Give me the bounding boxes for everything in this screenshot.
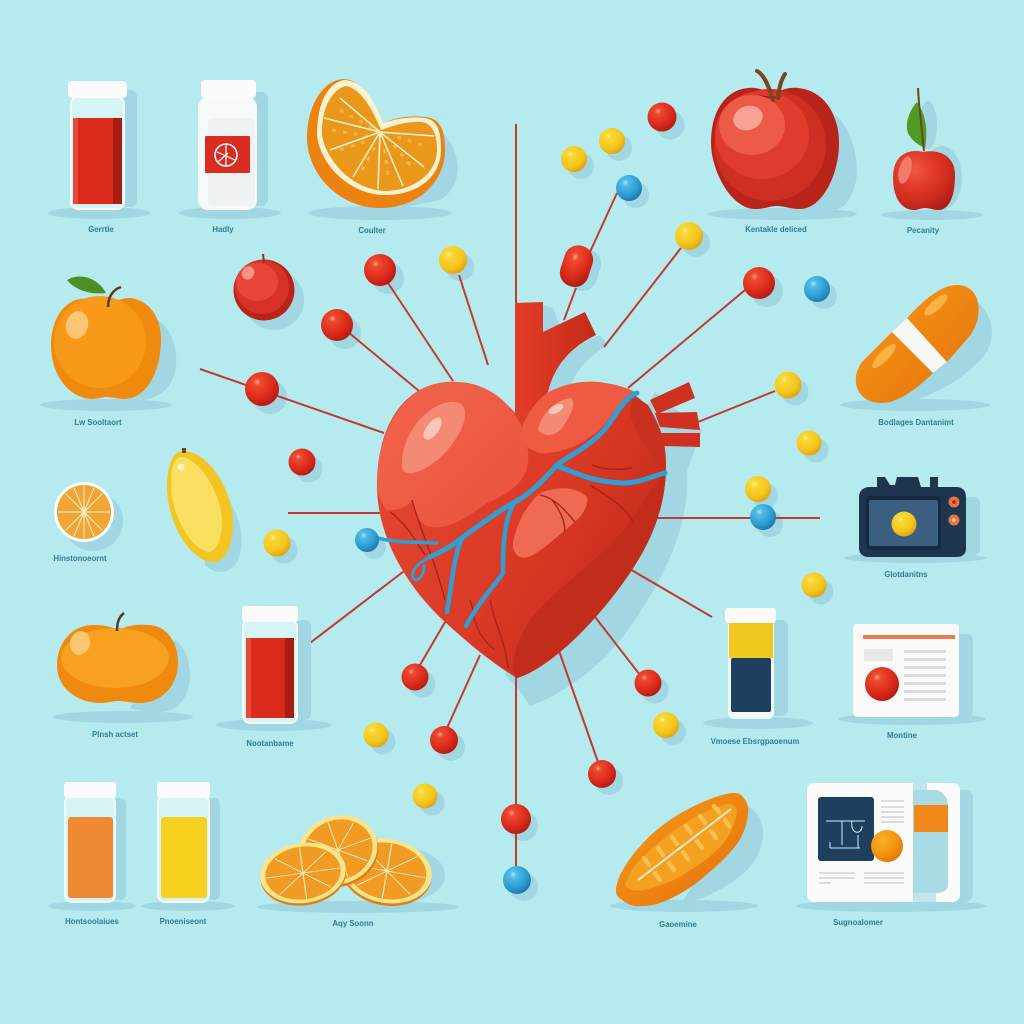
red balls <box>245 102 775 834</box>
heart shadow <box>505 305 702 706</box>
icon: yellow and navy jar <box>703 608 813 729</box>
label: Pnoeniseont <box>160 917 207 926</box>
label: Hontsoolaiues <box>65 917 120 926</box>
small red veins <box>390 465 633 668</box>
icon: small orange slice <box>54 482 123 551</box>
icon: yellow juice jar <box>141 782 235 911</box>
upper lobe highlight <box>538 398 573 435</box>
heart body <box>377 382 666 678</box>
label: Bodlages Dantanimt <box>878 418 954 427</box>
connector lines <box>200 124 820 868</box>
label: Glotdanitns <box>884 570 928 579</box>
label: Lw Sooltaort <box>74 418 122 427</box>
label: Coulter <box>358 226 386 235</box>
aorta vessels <box>515 302 596 428</box>
label: Hadly <box>212 225 234 234</box>
icon: three orange slices <box>256 804 459 913</box>
red capsule <box>556 242 597 291</box>
molecule balls <box>245 102 830 894</box>
label: Aqy Soonn <box>332 919 374 928</box>
icon: red jar lower <box>216 606 332 731</box>
icon: flat orange <box>53 613 193 723</box>
label: Plnsh actset <box>92 730 138 739</box>
label: Gerrtle <box>88 225 114 234</box>
left lobe <box>377 382 528 527</box>
ball shadows <box>253 110 837 901</box>
icon: small apple with leaf <box>881 88 983 220</box>
icon: white bottle <box>179 80 281 219</box>
label: Pecanity <box>907 226 940 235</box>
dark shoulder <box>630 394 666 468</box>
label: Montine <box>887 731 918 740</box>
icon: orange with leaf <box>40 276 176 411</box>
icon: camera <box>844 477 986 563</box>
icon: yellow mango <box>167 448 242 572</box>
icon: big orange half <box>307 79 458 220</box>
icon: red juice jar <box>48 81 150 219</box>
icon: red apple <box>707 71 857 220</box>
label: Vmoese Ebsrgpaoenum <box>711 737 799 746</box>
dark right shading <box>513 470 666 678</box>
blue balls <box>355 175 830 894</box>
lower ventricle highlight <box>513 488 587 558</box>
upper lobe glint <box>547 402 565 416</box>
icon: orange juice jar <box>48 782 136 911</box>
label: Sugnoalomer <box>833 918 883 927</box>
icon: red apple, small centre-left <box>234 254 304 330</box>
icon: document with red ball <box>838 624 986 725</box>
label: Kentakle deliced <box>745 225 807 234</box>
label: Gaoemine <box>659 920 698 929</box>
icon: report document with chart <box>796 783 986 912</box>
icon: orange seed pod <box>610 793 763 912</box>
icon: orange capsule with white band <box>840 285 992 411</box>
left lobe highlight <box>402 402 465 473</box>
heart illustration <box>377 302 700 678</box>
blue coronary vessels <box>378 393 665 626</box>
label: Nootanbame <box>246 739 294 748</box>
upper right lobe <box>520 382 637 453</box>
left lobe glint <box>423 418 442 440</box>
yellow balls <box>264 128 826 808</box>
label: Hinstonoeornt <box>53 554 107 563</box>
right vessels <box>650 382 700 447</box>
